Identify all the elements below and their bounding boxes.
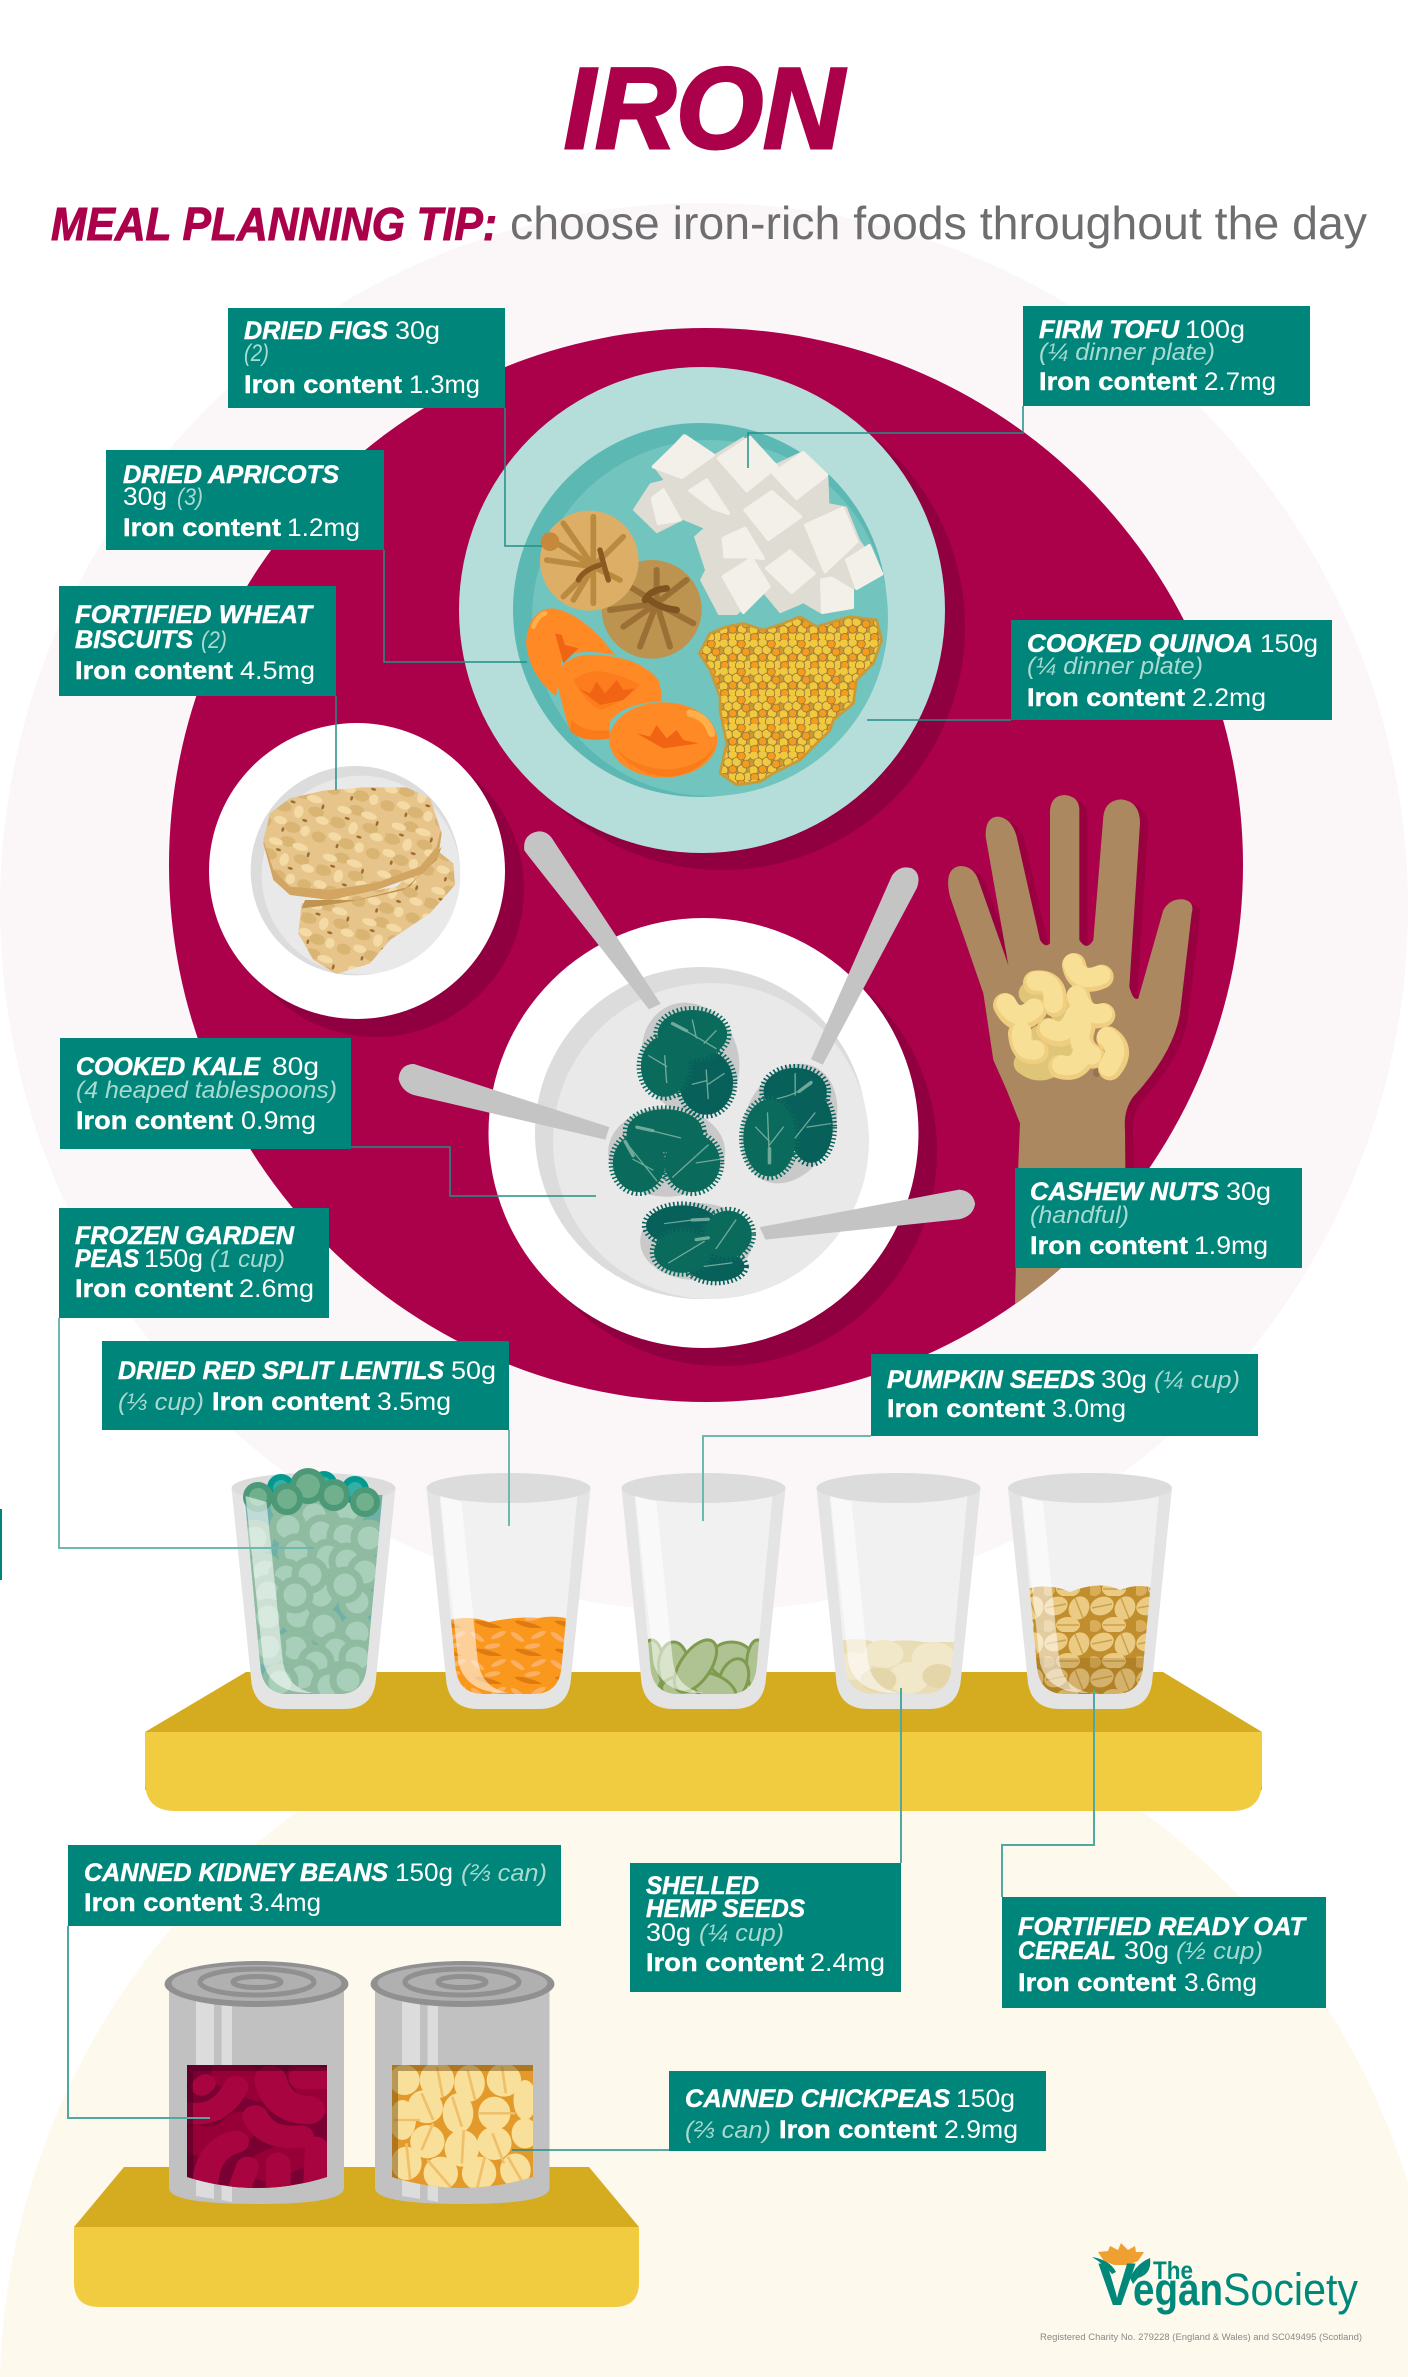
subtitle: meal planning tip: choose iron-rich foods throughout the day [510, 197, 1367, 249]
label: dried figs: (2) [244, 340, 269, 367]
label: fortified ready oat cereal: 3.6mg [1184, 1969, 1257, 1997]
label: canned kidney beans: 150g [395, 1859, 453, 1887]
label: dried apricots: 30g [123, 483, 167, 511]
logo: The Vegan Society: egan [1133, 2264, 1223, 2315]
title: IRON [564, 45, 847, 173]
logo: The Vegan Society [1040, 2243, 1362, 2342]
label: shelled hemp seeds: SHELLED [646, 1872, 759, 1900]
small teal edge mark [0, 1509, 2, 1580]
label: dried apricots: Iron content [123, 514, 282, 542]
label: dried red split lentils: 3.5mg [377, 1388, 451, 1416]
label: cooked kale: (4 heaped tablespoons) [76, 1077, 337, 1104]
background: cream circle [0, 1675, 1408, 2377]
upper shelf [145, 1672, 1262, 1811]
label: firm tofu: 100g [1185, 316, 1245, 344]
label: canned chickpeas: (⅔ can) [685, 2117, 771, 2144]
label: fortified ready oat cereal [1002, 1897, 1326, 2008]
label: firm tofu [1023, 306, 1310, 406]
label: dried red split lentils: (⅓ cup) [118, 1389, 204, 1416]
label: cooked quinoa [1011, 620, 1332, 720]
label: shelled hemp seeds [630, 1863, 901, 1992]
biscuit plate [209, 723, 524, 1037]
label: firm tofu: 2.7mg [1204, 368, 1276, 396]
label: pumpkin seeds: (¼ cup) [1154, 1367, 1240, 1394]
label: frozen garden peas: FROZEN GARDEN [75, 1222, 295, 1250]
label: dried red split lentils: DRIED RED SPLIT LENTILS [118, 1357, 444, 1385]
label: cashew nuts: 30g [1226, 1178, 1271, 1206]
bowl plate with kale and spoons [399, 831, 975, 1366]
glass: frozen garden peas [232, 1471, 396, 1709]
kale veins [625, 1020, 831, 1266]
glass: shelled hemp seeds [816, 1473, 980, 1709]
label: cooked quinoa: Iron content [1027, 684, 1186, 712]
label: canned chickpeas [669, 2071, 1046, 2151]
label: pumpkin seeds [871, 1354, 1258, 1436]
label: cooked quinoa: COOKED QUINOA [1027, 630, 1253, 658]
label: dried red split lentils: Iron content [212, 1388, 371, 1416]
label: frozen garden peas: PEAS [75, 1245, 139, 1273]
label: shelled hemp seeds: Iron content [646, 1949, 805, 1977]
label: shelled hemp seeds: HEMP SEEDS [646, 1895, 805, 1923]
label: cooked kale: COOKED KALE [76, 1053, 261, 1081]
label: cashew nuts: (handful) [1030, 1202, 1129, 1229]
label: frozen garden peas: 150g [144, 1245, 203, 1273]
food: dried figs [540, 511, 702, 659]
label: dried figs: DRIED FIGS [244, 317, 388, 345]
label: fortified ready oat cereal: CEREAL [1018, 1937, 1116, 1965]
label: cashew nuts: Iron content [1030, 1232, 1189, 1260]
label: dried red split lentils: 50g [451, 1357, 496, 1385]
food: dried apricots [526, 608, 717, 778]
label: dried figs: Iron content [244, 371, 403, 399]
glass: dried red split lentils [426, 1473, 590, 1709]
label: canned chickpeas: Iron content [779, 2116, 938, 2144]
label: frozen garden peas: (1 cup) [210, 1246, 285, 1273]
label: frozen garden peas [59, 1208, 329, 1318]
label: fortified wheat biscuits [59, 586, 336, 696]
glass: fortified ready oat cereal [1008, 1473, 1172, 1709]
label: cashew nuts [1015, 1168, 1302, 1268]
label: pumpkin seeds: 3.0mg [1052, 1395, 1126, 1423]
label: dried figs [228, 308, 505, 408]
leader lines [59, 406, 1094, 2150]
food: fortified wheat biscuits [263, 787, 455, 974]
label: shelled hemp seeds: 30g [646, 1919, 691, 1947]
food: firm tofu [633, 434, 883, 615]
subtitle: meal planning tip: MEAL PLANNING TIP: [51, 198, 497, 250]
label: canned kidney beans: CANNED KIDNEY BEANS [84, 1859, 388, 1887]
label: cooked quinoa: (¼ dinner plate) [1027, 653, 1203, 680]
label: firm tofu: (¼ dinner plate) [1039, 339, 1215, 366]
logo: The Vegan Society: Society [1223, 2264, 1358, 2315]
icon: leaf swoosh [1092, 2257, 1150, 2284]
label: frozen garden peas: 2.6mg [239, 1275, 314, 1303]
label: fortified ready oat cereal: (½ cup) [1176, 1938, 1263, 1965]
label: cashew nuts: CASHEW NUTS [1030, 1178, 1219, 1206]
icon: lotus flower [1098, 2243, 1144, 2265]
label: dried figs: 1.3mg [409, 371, 480, 399]
large burgundy circle [169, 328, 1243, 1402]
label: canned chickpeas: 150g [956, 2085, 1015, 2113]
spoons [399, 831, 975, 1280]
label: dried red split lentils [102, 1341, 509, 1430]
label: canned chickpeas: CANNED CHICKPEAS [685, 2085, 950, 2113]
label: cooked kale: Iron content [76, 1107, 234, 1135]
lower shelf [74, 2167, 639, 2307]
label: canned kidney beans: 3.4mg [249, 1889, 321, 1917]
label: fortified wheat biscuits: BISCUITS [75, 626, 193, 654]
hand holding cashew nuts [948, 795, 1200, 1303]
label: pumpkin seeds: PUMPKIN SEEDS [887, 1366, 1095, 1394]
food: cashew nuts [1005, 963, 1117, 1073]
label: canned kidney beans [68, 1845, 561, 1926]
label: fortified wheat biscuits: 4.5mg [240, 657, 315, 685]
label: cooked kale: 80g [272, 1053, 319, 1081]
label: shelled hemp seeds: 2.4mg [810, 1949, 885, 1977]
label: shelled hemp seeds: (¼ cup) [699, 1920, 784, 1947]
label: cooked kale [60, 1038, 351, 1149]
label: fortified wheat biscuits: (2) [201, 627, 227, 654]
label: firm tofu: Iron content [1039, 368, 1198, 396]
label: fortified ready oat cereal: 30g [1124, 1937, 1169, 1965]
label: frozen garden peas: Iron content [75, 1275, 234, 1303]
logo: The Vegan Society: The [1153, 2257, 1193, 2285]
label: cashew nuts: 1.9mg [1194, 1232, 1268, 1260]
label: dried apricots: 1.2mg [287, 514, 360, 542]
teal plate with figs, apricots, tofu, quinoa [459, 367, 965, 870]
label: dried figs: 30g [395, 317, 440, 345]
background: pale pink circle [0, 203, 1408, 1611]
label: fortified wheat biscuits: FORTIFIED WHEAT [75, 601, 315, 629]
glass: pumpkin seeds [622, 1473, 786, 1710]
label: fortified ready oat cereal: Iron content [1018, 1969, 1177, 1997]
label: pumpkin seeds: 30g [1101, 1366, 1147, 1394]
label: fortified wheat biscuits: Iron content [75, 657, 234, 685]
label: dried apricots [106, 450, 384, 550]
subtitle: meal planning tip [51, 197, 1367, 250]
label: canned kidney beans: (⅔ can) [461, 1860, 547, 1887]
label: dried apricots: (3) [177, 484, 203, 511]
label: firm tofu: FIRM TOFU [1039, 316, 1180, 344]
label: canned chickpeas: 2.9mg [944, 2116, 1018, 2144]
label: cooked kale: 0.9mg [241, 1107, 316, 1135]
food: cooked kale [613, 1010, 833, 1281]
can: canned kidney beans [164, 1961, 348, 2204]
can: canned chickpeas [370, 1961, 554, 2204]
label: cooked quinoa: 150g [1260, 630, 1318, 658]
label: canned kidney beans: Iron content [84, 1889, 243, 1917]
label: dried apricots: DRIED APRICOTS [123, 461, 339, 489]
label: pumpkin seeds: Iron content [887, 1395, 1046, 1423]
food: cooked quinoa [699, 617, 882, 785]
label: cooked quinoa: 2.2mg [1192, 684, 1266, 712]
logo: The Vegan Society: V [1098, 2251, 1136, 2318]
logo: The Vegan Society: Registered Charity No. 279228 (England & Wales) and SC049495 (Scotland) [1040, 2332, 1362, 2342]
label: fortified ready oat cereal: FORTIFIED READY OAT [1018, 1913, 1308, 1941]
